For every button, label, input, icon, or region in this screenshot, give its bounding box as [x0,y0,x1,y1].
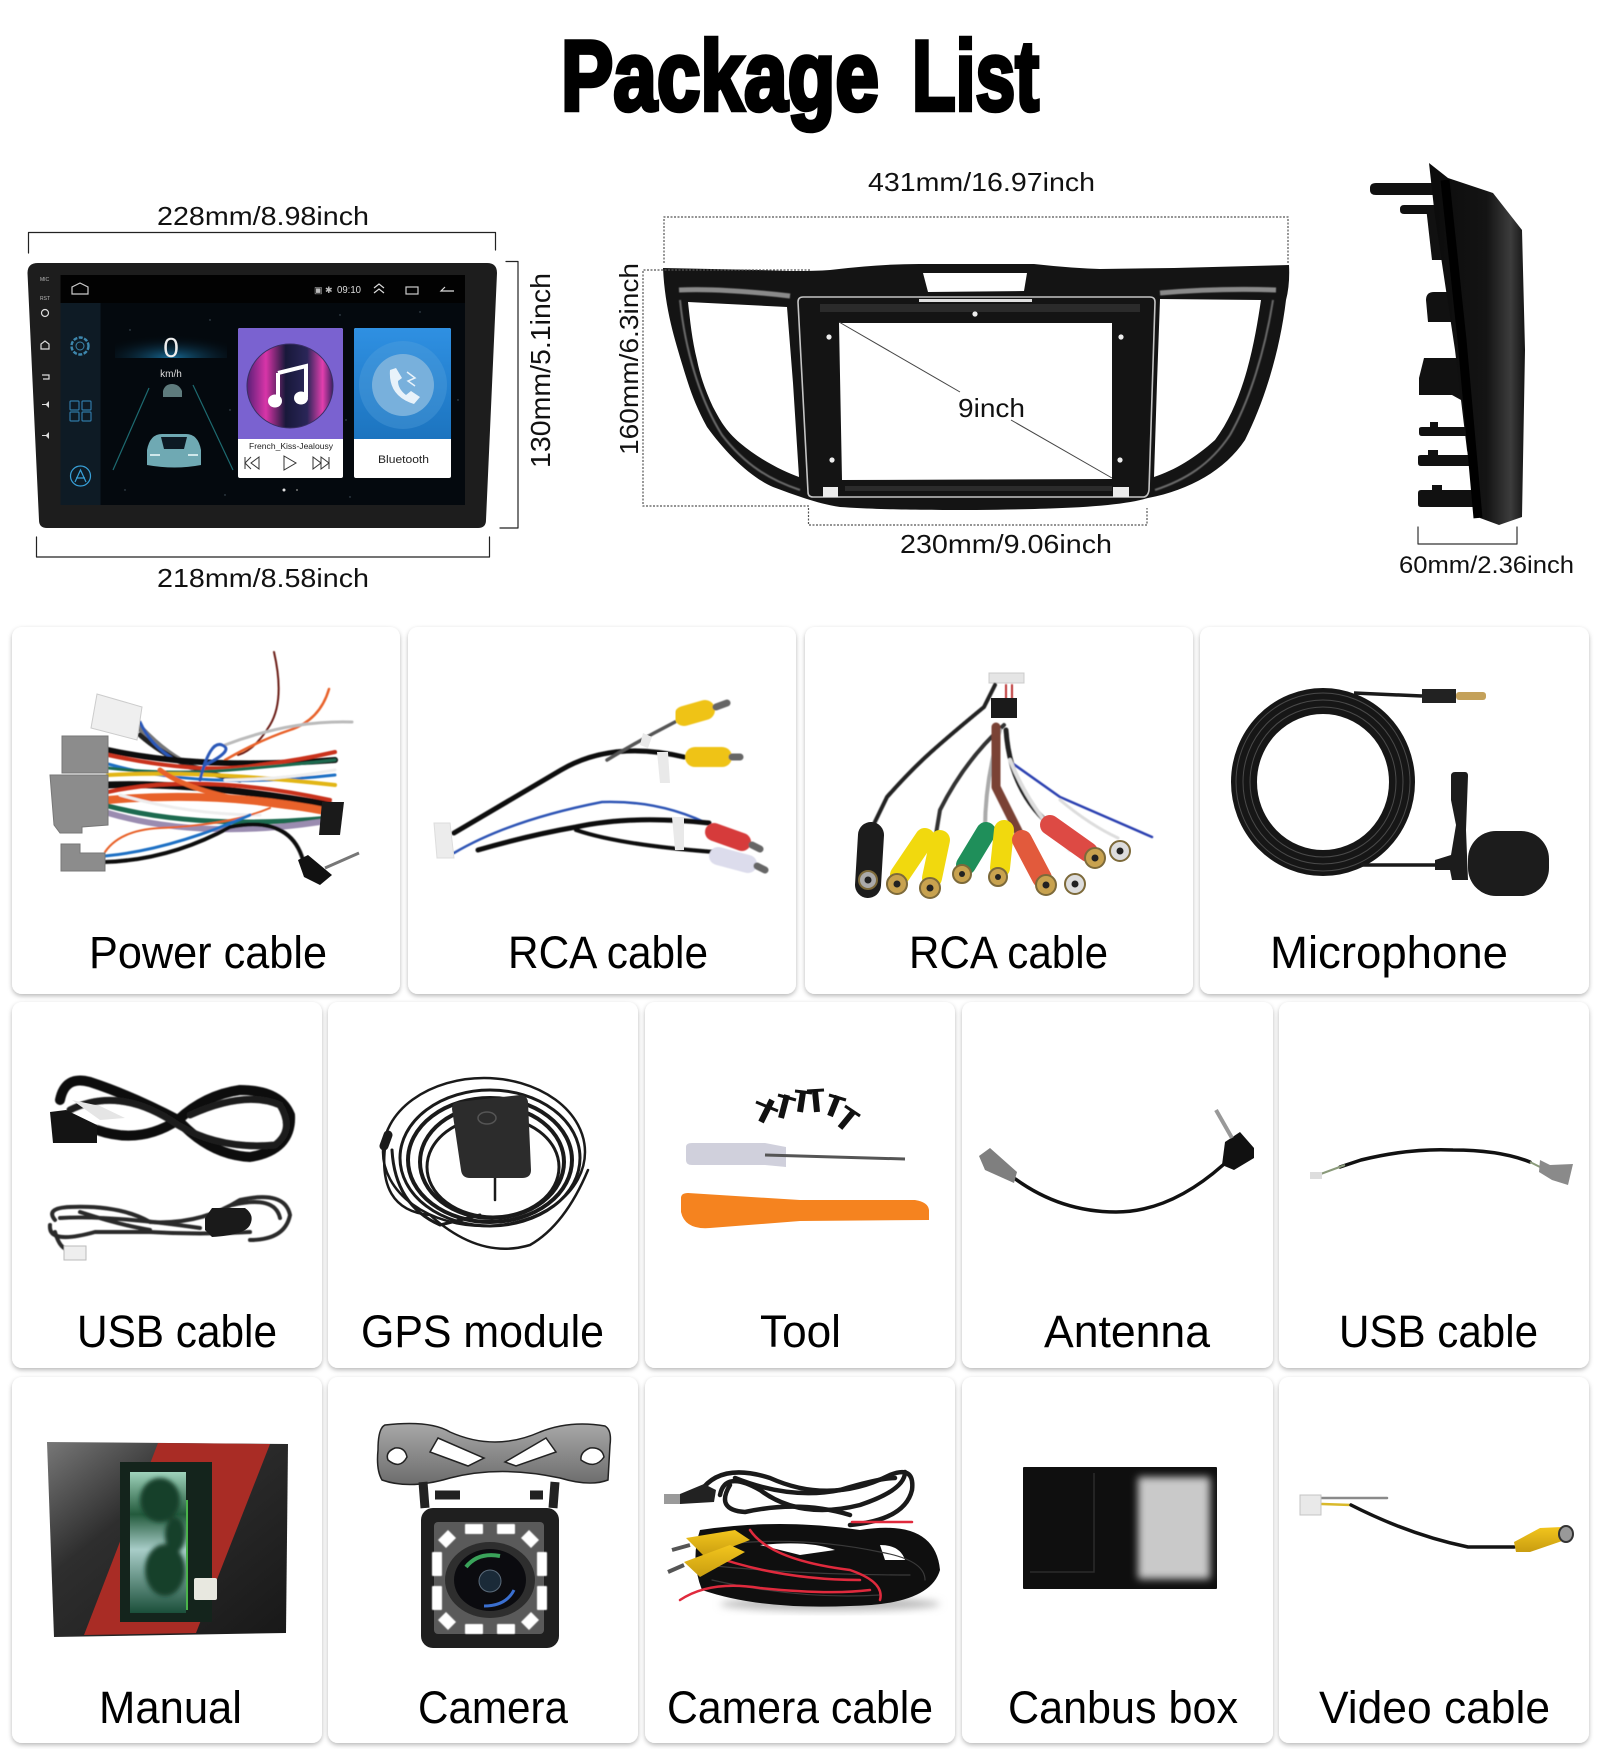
jack [1422,689,1456,703]
bezel [28,263,497,528]
white terminal [1300,1495,1321,1515]
brackets [423,1482,555,1508]
sidebar [60,303,100,505]
label: bottom width: 218mm/8.58inch [157,563,369,593]
USB plug 2 [205,1208,252,1237]
lens glints [466,1555,500,1567]
panel: antenna [962,1002,1273,1368]
music card: French_Kiss-Jealousy [249,441,334,451]
embossed outline [1030,1473,1094,1572]
label: frame bottom: 230mm/9.06inch [900,529,1112,559]
side tabs [1370,183,1486,507]
label: Canbus box [1008,1682,1238,1733]
red stripe [84,1443,270,1635]
label: USB cable [1339,1306,1538,1357]
GPS emblem [478,1112,496,1124]
panel: camera cable [645,1377,955,1743]
bracket: frame bottom [808,508,1147,525]
bluetooth card [354,328,451,478]
inner bracket outline [798,297,1155,497]
harness [105,652,352,862]
GPS cable loops [383,1078,588,1249]
label: top width: 228mm/8.98inch [157,201,369,231]
coil stripes [705,1541,925,1596]
bracket: frame width [664,217,1288,263]
jack tip [1456,692,1486,700]
GPS antenna puck [452,1095,531,1178]
dash frame dimensions and drawing [614,167,1289,559]
plug tips [859,841,1130,898]
label: Microphone [1270,927,1508,978]
box [1023,1467,1217,1589]
white clip squares [823,487,1129,497]
head unit dimensions and device [28,201,556,593]
status bar [60,275,465,303]
cable tags [640,733,684,850]
panel: USB cable 2 [1279,1002,1589,1368]
label smudges [1176,1482,1184,1568]
label: USB cable [77,1306,277,1357]
camera body [421,1508,559,1648]
manual cover [47,1442,288,1637]
speedometer: km/h [160,369,182,380]
green line [186,1500,188,1610]
bracket: bottom width [36,537,490,557]
white connector [91,694,142,740]
black connector [319,802,344,835]
label: GPS module [361,1306,604,1357]
black cable [1351,1505,1514,1547]
gray connector [1539,1160,1573,1185]
panel: USB cable 1 [12,1002,322,1368]
side body [1429,163,1525,525]
status bar: 09:10 [337,285,361,296]
panel: video cable [1279,1377,1589,1743]
speedometer: 0 [163,332,179,363]
angled plug [1222,1132,1254,1170]
panel: manual [12,1377,322,1743]
label: RCA cable [508,927,708,978]
panel: canbus box [962,1377,1273,1743]
panel: GPS module [328,1002,638,1368]
panel: power cable [12,627,400,994]
side view of frame [1370,163,1574,579]
bracket: depth [1418,527,1517,544]
label: Camera [418,1682,569,1733]
white tag [194,1578,217,1600]
upper cable [60,1080,290,1157]
label: frame width: 431mm/16.97inch [868,167,1095,197]
label: Tool [760,1306,841,1357]
aux jack [298,855,332,885]
device screen [130,1472,186,1613]
wires [454,722,714,853]
connector top [989,673,1024,683]
side bezel buttons [40,277,50,439]
screw holes [826,311,1124,463]
screwdriver shaft [765,1155,905,1159]
camera face [434,1522,544,1634]
power plug tip [664,1494,680,1504]
thin wires [1318,1162,1542,1175]
screen foliage [140,1478,185,1596]
panel: tool [645,1002,955,1368]
screws [756,1090,860,1128]
device on cover [120,1462,212,1622]
clip [1435,772,1468,880]
status bar: ▣ ✱ [314,285,333,295]
silver strip [919,299,1032,302]
inner lining [820,304,1140,491]
mounting plate [378,1424,610,1485]
speedometer [113,325,233,470]
music card [238,328,343,478]
label: Camera cable [667,1682,933,1733]
power plug body [680,1484,716,1504]
side bezel buttons: RST [40,296,50,302]
wires [871,685,1152,850]
yellow RCA plug [1514,1527,1565,1552]
LED glow [432,1524,547,1634]
bluetooth card: Bluetooth [378,454,429,466]
label: Manual [99,1682,242,1733]
plugs [684,703,765,870]
orange pry tool [681,1193,929,1228]
panel: camera [328,1377,638,1743]
page dots [282,488,298,492]
red wires [680,1522,912,1600]
gray connector [979,1148,1017,1183]
title: Package [561,20,879,131]
screen [60,275,465,505]
bracket: frame height [643,270,810,506]
lens ring [445,1542,535,1618]
lens glint blue [484,1590,514,1606]
aux pin [325,853,359,868]
USB plug [50,1110,97,1143]
gray connectors [50,736,108,871]
screwdriver handle [686,1143,786,1167]
gray wire [1320,1497,1387,1499]
label: Video cable [1319,1682,1550,1733]
top coil [700,1472,912,1525]
bracket: top width [28,232,496,253]
side spine [1445,180,1478,518]
yellow wire [1322,1504,1351,1505]
yellow RCA plugs [668,1530,750,1577]
frame body [663,264,1289,510]
coil inner gaps [760,1543,905,1560]
bracket: height [500,262,518,528]
frame sheen [679,289,1276,490]
label: Antenna [1044,1306,1211,1357]
panel: microphone [1200,627,1589,994]
panel: RCA cable 1 [408,627,796,994]
coil [1236,693,1410,871]
drop shadow under coil [720,1597,940,1611]
panel: RCA cable 2 [805,627,1193,994]
foam [1468,831,1549,896]
title: List [912,20,1039,131]
starfield [124,311,459,498]
label: Power cable [89,927,327,978]
label: frame height: 160mm/6.3inch [614,263,644,455]
white terminal [64,1246,86,1260]
lens [454,1549,526,1611]
lens center [479,1570,501,1592]
RCA plugs [868,825,1088,885]
wire block [991,698,1017,718]
diagonal [839,322,1112,478]
label: 9 inch: 9inch [958,393,1025,423]
cable [1340,1150,1530,1167]
label: depth: 60mm/2.36inch [1399,552,1574,579]
side bezel buttons: MIC [40,277,50,283]
plug tip [1559,1526,1573,1542]
label: height: 130mm/5.1inch [525,273,556,468]
lower cable [50,1197,290,1250]
white end [1310,1172,1322,1179]
cables [1354,693,1435,865]
connector [434,823,454,858]
antenna pin [1216,1110,1232,1138]
antenna wire [1014,1165,1223,1212]
label: RCA cable [909,927,1108,978]
blurred label [1138,1477,1210,1579]
plug centers [864,848,1124,892]
connector glimpse [72,1100,125,1120]
bottom coil mass [695,1524,940,1607]
